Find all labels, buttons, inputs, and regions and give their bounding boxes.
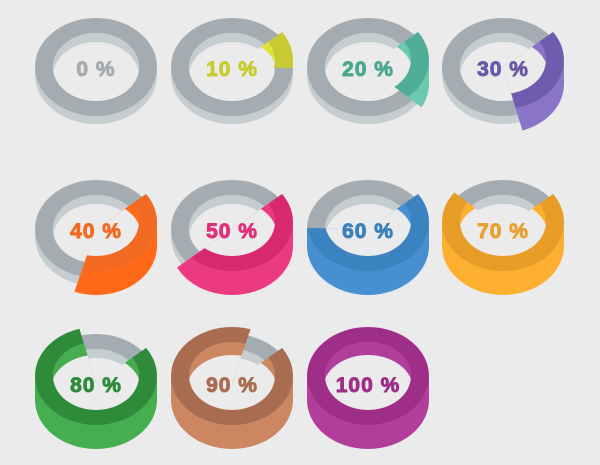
ring: 80% (35, 327, 157, 449)
ring: 60% (307, 173, 429, 295)
ring: 50%: 50 % (206, 220, 258, 243)
ring: 90% (171, 327, 293, 449)
ring: 70%: 70 % (477, 220, 529, 243)
ring: 30%: 30 % (477, 58, 529, 81)
ring: 50% (171, 173, 293, 295)
ring: 0% (35, 18, 157, 124)
ring: 20%: 20 % (342, 58, 394, 81)
ring: 30% (442, 11, 564, 133)
ring: 100%: 100 % (336, 374, 400, 397)
ring: 0%: 0 % (76, 58, 116, 81)
ring: 60%: 60 % (342, 220, 394, 243)
ring: 10%: 10 % (206, 58, 258, 81)
ring: 40% (35, 173, 157, 295)
ring: 20% (307, 18, 429, 124)
ring: 80%: 80 % (70, 374, 122, 397)
ring: 10% (171, 18, 293, 124)
ring: 70% (442, 173, 564, 295)
ring: 90%: 90 % (206, 374, 258, 397)
ring: 100% (307, 327, 429, 449)
ring: 40%: 40 % (70, 220, 122, 243)
